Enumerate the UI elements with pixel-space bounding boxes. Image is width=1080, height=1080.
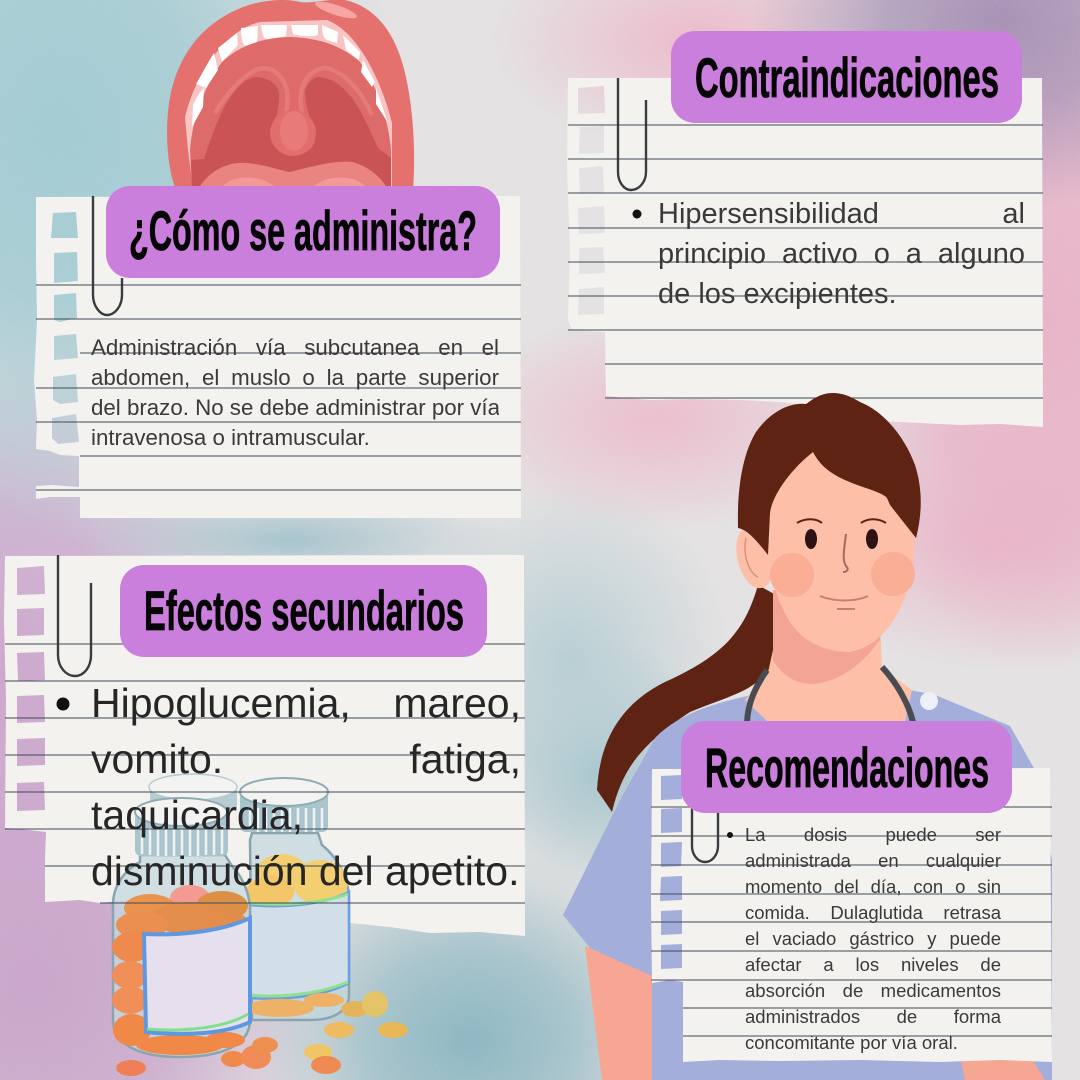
ruled lines over bottles <box>5 644 525 903</box>
stethoscope <box>747 667 913 722</box>
text: efectos secundarios body: Hipoglucemia, mareo, <box>91 680 521 726</box>
heading: efectos secundarios <box>120 565 487 657</box>
cheeks <box>770 553 814 597</box>
neck <box>745 590 912 722</box>
text: como se administra body: Administración vía subcutanea en el <box>91 335 499 360</box>
text: recomendaciones body: La dosis puede ser <box>745 824 1001 845</box>
text: recomendaciones body <box>745 824 1001 1053</box>
icon: paperclip <box>58 555 91 676</box>
text: efectos secundarios body: vomito. fatiga, <box>91 736 521 782</box>
text: como se administra body: intravenosa o intramuscular. <box>91 425 370 450</box>
illustration: open mouth <box>167 0 414 190</box>
heading: como se administra <box>106 186 500 278</box>
text: recomendaciones body: administrada en cualquier <box>745 850 1001 871</box>
text: recomendaciones body: comida. Dulaglutida retrasa <box>745 902 1001 923</box>
face <box>768 440 915 652</box>
text: recomendaciones body: afectar a los niveles de <box>745 954 1001 975</box>
text: contraindicaciones body <box>658 198 1025 310</box>
front bottle back cap <box>149 774 237 810</box>
pills <box>112 885 250 1055</box>
icon: paperclip <box>692 800 718 862</box>
heading: contraindicaciones <box>671 31 1022 123</box>
nose and mouth <box>843 534 848 572</box>
text: como se administra body <box>91 335 499 450</box>
ponytail <box>597 585 785 812</box>
back bottle <box>240 778 349 1020</box>
text: efectos secundarios body <box>91 680 521 894</box>
panel: como se administra paper <box>34 196 521 518</box>
scattered pills <box>116 991 408 1076</box>
text: recomendaciones body: absorción de medicamentos <box>745 980 1001 1001</box>
bullet: recomendaciones <box>727 832 733 838</box>
text: contraindicaciones body: principio activo o a alguno <box>658 238 1025 270</box>
bullet: contraindicaciones <box>632 210 642 218</box>
text: como se administra body: del brazo. No se debe administrar por vía <box>91 395 499 420</box>
text: como se administra body: abdomen, el muslo o la parte superior <box>91 365 499 390</box>
panel: contraindicaciones paper <box>567 78 1043 427</box>
icon: paperclip <box>618 78 646 190</box>
panel: recomendaciones paper <box>651 768 1052 1062</box>
illustration: nurse <box>563 393 1052 1080</box>
text: recomendaciones body: concomitante por vía oral. <box>745 1032 958 1053</box>
text: efectos secundarios body: disminución del apetito. <box>91 848 519 894</box>
front bottle <box>112 798 250 1057</box>
uniform <box>563 688 1052 1080</box>
heading: como se administra: ¿Cómo se administra? <box>129 199 477 262</box>
text: recomendaciones body: momento del día, con o sin <box>745 876 1001 897</box>
hair <box>738 393 921 555</box>
ear <box>736 530 772 588</box>
arm <box>585 946 652 1080</box>
button <box>920 692 938 710</box>
icon: paperclip <box>93 196 122 315</box>
text: contraindicaciones body: de los excipientes. <box>658 278 897 310</box>
text: efectos secundarios body: taquicardia, <box>91 792 303 838</box>
eyes and brows <box>805 529 817 549</box>
text: recomendaciones body: el vaciado gástrico y puede <box>745 928 1001 949</box>
teeth <box>192 25 388 127</box>
bullet: efectos <box>56 698 70 710</box>
heading: efectos secundarios: Efectos secundarios <box>144 579 464 642</box>
illustration: pill bottles <box>112 774 408 1076</box>
text: recomendaciones body: administrados de forma <box>745 1006 1001 1027</box>
text: contraindicaciones body: Hipersensibilidad al <box>658 198 1025 230</box>
heading: recomendaciones <box>681 721 1012 813</box>
panel: efectos secundarios paper <box>4 555 525 936</box>
